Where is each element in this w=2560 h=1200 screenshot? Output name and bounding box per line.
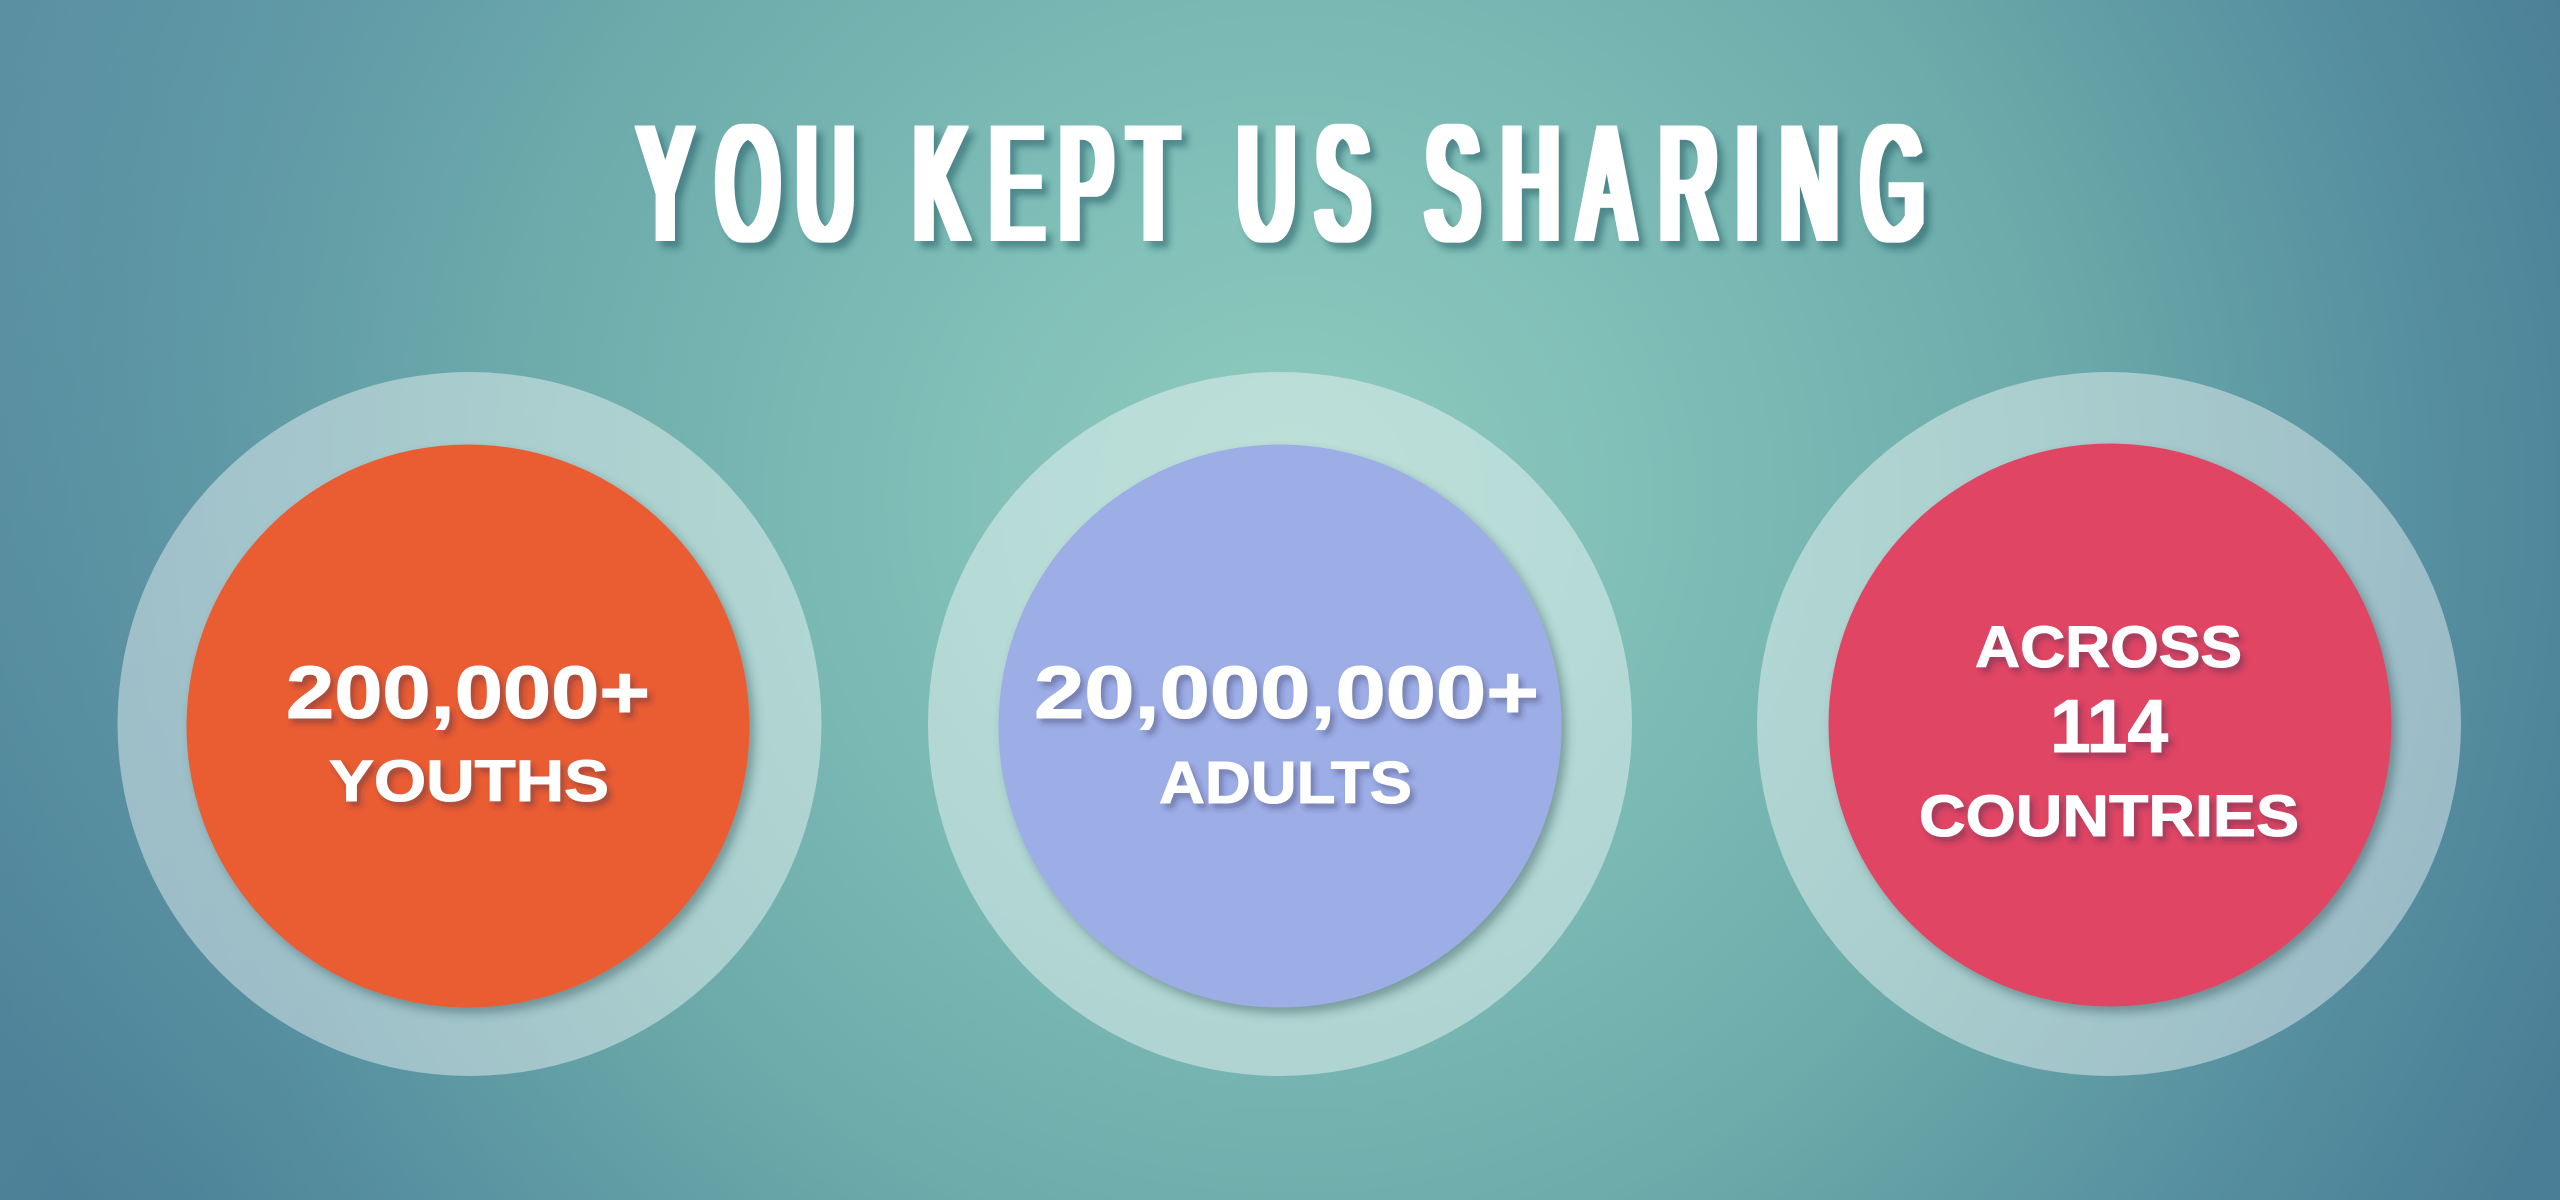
title: YOU KEPT US SHARING xyxy=(639,92,1924,276)
panel: youths stat xyxy=(118,372,822,1076)
label: adults: ADULTS xyxy=(1159,750,1412,816)
crimson disc xyxy=(1828,444,2392,1006)
panel: adults stat xyxy=(928,372,1632,1076)
number: 20,000,000+: 20,000,000+ xyxy=(1034,651,1539,734)
orange disc xyxy=(186,444,750,1008)
label: youths: YOUTHS xyxy=(329,749,609,814)
label: across: ACROSS xyxy=(1975,615,2242,680)
outer ring: adults xyxy=(928,372,1632,1076)
outer ring: youths xyxy=(118,372,822,1076)
periwinkle disc xyxy=(998,444,1562,1008)
number: 200,000+: 200,000+ xyxy=(286,651,650,734)
label: countries: COUNTRIES xyxy=(1919,784,2299,849)
number: 114: 114 xyxy=(2050,684,2168,768)
outer ring: countries xyxy=(1757,372,2461,1076)
panel: countries stat xyxy=(1757,372,2461,1076)
